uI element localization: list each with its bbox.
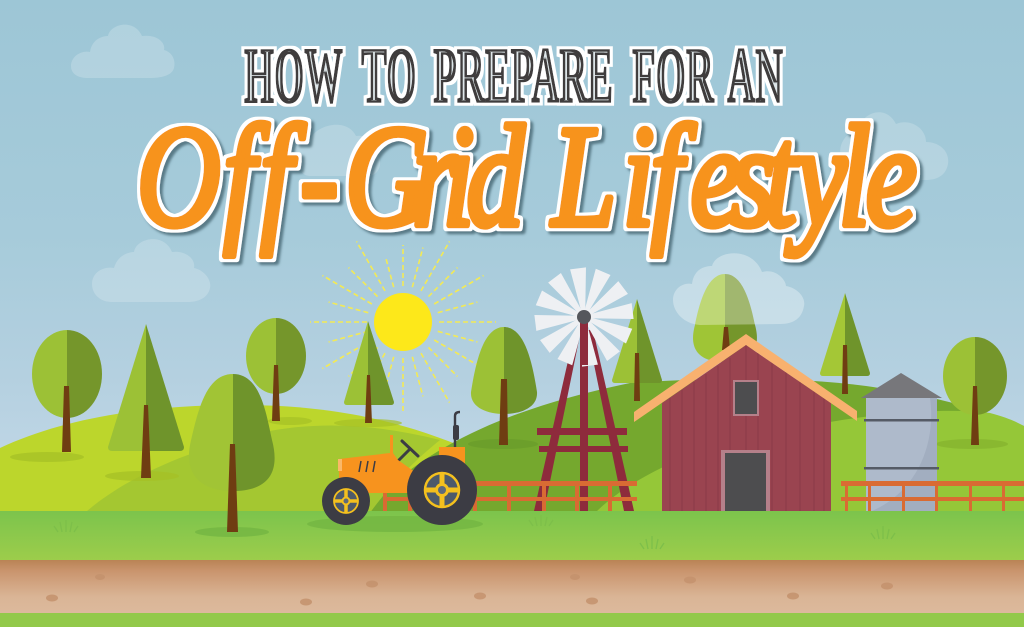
sun: [374, 293, 432, 351]
fence: left: [383, 481, 637, 511]
barn roof: [634, 334, 857, 422]
windmill hub: [577, 310, 591, 324]
tree: cone under sun: [334, 321, 402, 427]
cloud: in front of tree, right: [673, 253, 804, 325]
barn: [634, 334, 857, 511]
title line: How to prepare for an: TO: [361, 33, 416, 120]
windmill tower: [534, 320, 634, 511]
title line: How to prepare for an: HOW: [244, 33, 343, 120]
title line: How to prepare for an: AN: [727, 33, 783, 120]
tree: far left round: [10, 330, 102, 462]
cloud: behind title left: [294, 125, 380, 176]
tree: cone right: [820, 293, 870, 394]
tractor steering wheel: [397, 441, 418, 462]
windmill tower top: [580, 322, 588, 365]
hill: left pale: [0, 405, 470, 520]
barn wall: [662, 345, 831, 511]
hill: middle left: [87, 426, 440, 520]
cloud: top left: [71, 25, 175, 78]
title line: How to prepare for an: PREPARE: [433, 33, 613, 120]
dirt road: [0, 560, 1024, 613]
tree: behind right cloud: [693, 274, 757, 362]
cloud: left of sun: [92, 239, 210, 302]
tractor fender: [439, 447, 465, 465]
tractor shadow: [307, 516, 483, 532]
title line: How to prepare for an: FOR: [632, 33, 714, 120]
tree: egg center: [468, 327, 538, 449]
tree: left cone: [105, 324, 184, 481]
tractor front wheel: [322, 477, 370, 525]
grass ground: [0, 511, 1024, 561]
grass tufts: [54, 515, 895, 549]
barn door: [721, 450, 770, 511]
tree: large egg foreground: [189, 374, 275, 491]
tractor body: [339, 435, 418, 493]
hill: back right dark: [365, 379, 1024, 520]
hill: front right: [597, 411, 1024, 520]
fence: right: [841, 481, 1024, 511]
tractor grill: [338, 459, 342, 471]
cloud: behind title right: [840, 112, 948, 180]
foreground big tree trunk: [195, 444, 269, 537]
tractor rear wheel: [407, 455, 477, 525]
bottom grass strip: [0, 613, 1024, 627]
silo: [861, 373, 942, 511]
tree: far right round: [936, 337, 1008, 449]
title line: How to prepare for an: [244, 33, 783, 120]
tree: cone behind windmill: [612, 299, 662, 401]
tractor exhaust: [453, 412, 460, 447]
road pebbles: [46, 574, 893, 606]
tractor: [307, 412, 483, 532]
tree: small round behind big tree: [246, 318, 312, 425]
windmill blades: [534, 267, 634, 367]
barn window: [733, 380, 759, 416]
tractor vents: [359, 461, 375, 472]
sun rays: [310, 241, 496, 413]
title script: Off-Grid Lifestyle: Off-Grid Lifestyle: [137, 97, 917, 257]
